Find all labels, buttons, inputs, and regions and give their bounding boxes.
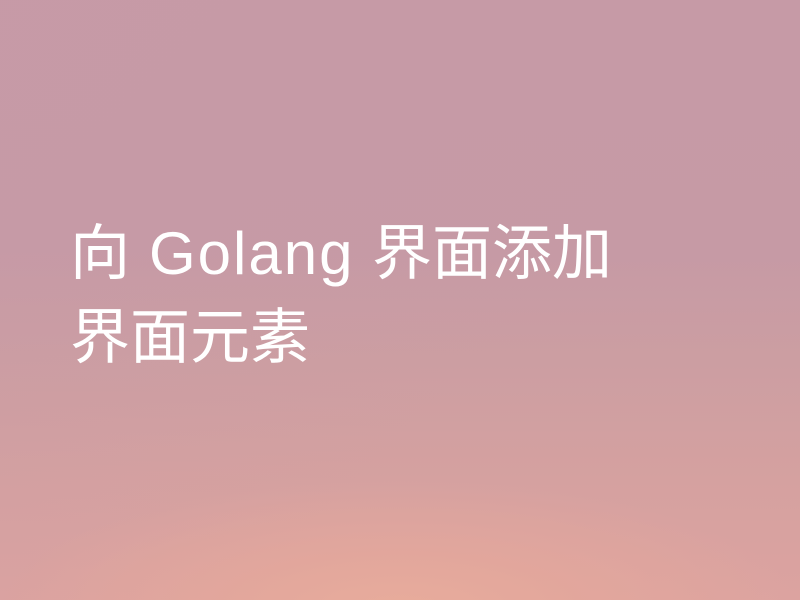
title: 界面添加 <box>372 220 612 287</box>
title: Golang <box>149 220 354 287</box>
title: 界面元素 <box>70 304 310 371</box>
title: 向 <box>70 220 130 287</box>
